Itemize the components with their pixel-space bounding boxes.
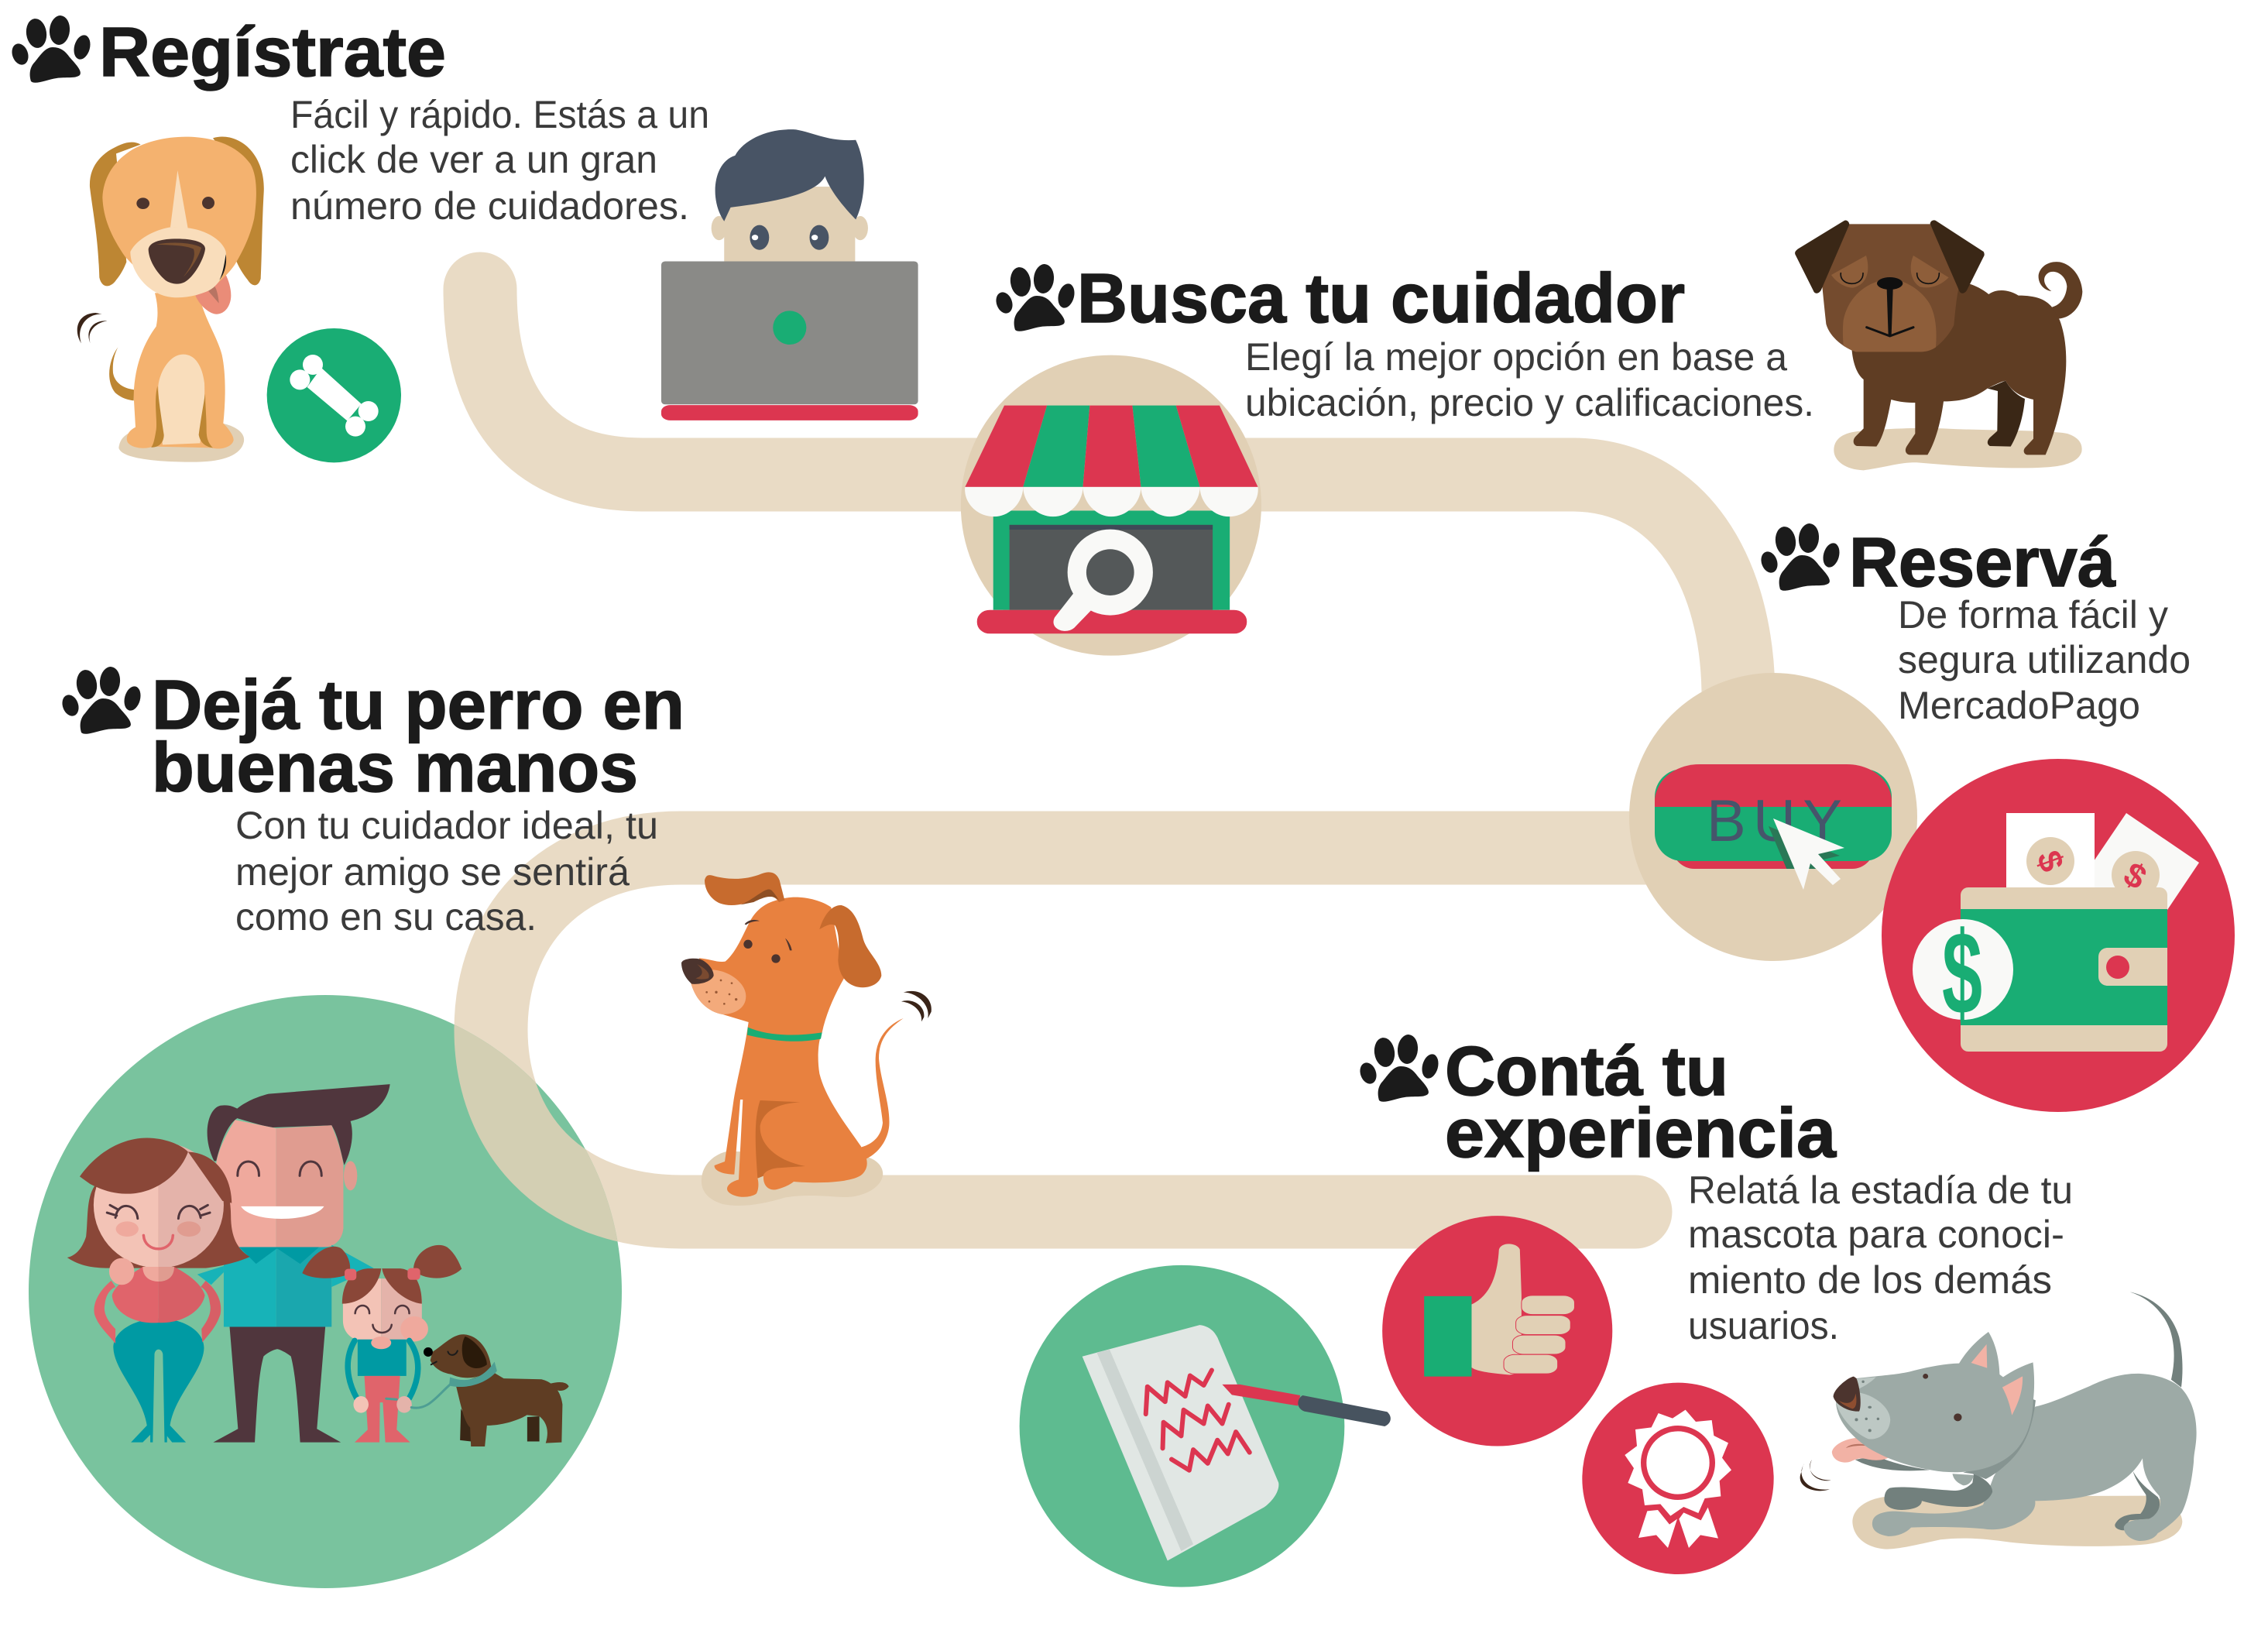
text: dejá description: como en su casa.: [235, 895, 537, 939]
icon: notebook and pen badge: [1020, 1265, 1391, 1587]
text: busca description: [1245, 335, 1814, 424]
text: contá description: [1688, 1168, 2073, 1347]
illustration: wallet badge: [1882, 759, 2235, 1112]
text: contá description: usuarios.: [1688, 1304, 1839, 1347]
heading: Contá tu experiencia: Contá tu: [1445, 1033, 1728, 1110]
illustration: family with dog: [67, 1084, 569, 1446]
heading: Regístrate: Regístrate: [99, 14, 446, 91]
icon: bone badge: [267, 328, 401, 462]
text: reservá description: MercadoPago: [1898, 684, 2140, 727]
road: lower winding path: [491, 848, 1781, 1212]
heading: Dejá tu perro en buenas manos: [60, 666, 685, 807]
text: registrate description: click de ver a un gran: [290, 138, 657, 181]
text: dejá description: Con tu cuidador ideal, tu: [235, 804, 658, 847]
text: reservá description: [1898, 593, 2191, 727]
heading: Busca tu cuidador: Busca tu cuidador: [1077, 260, 1685, 338]
heading: Dejá tu perro en buenas manos: Dejá tu perro en: [152, 667, 685, 744]
road overlap on family circle: [454, 1024, 618, 1242]
illustration: yellow dog: [77, 136, 264, 462]
heading: Dejá tu perro en buenas manos: buenas manos: [152, 729, 638, 807]
illustration: wallet badge: $: [2117, 855, 2153, 897]
illustration: orange dog: [681, 872, 932, 1206]
heading: Contá tu experiencia: experiencia: [1445, 1095, 1837, 1172]
illustration: man at laptop: [661, 129, 918, 420]
girl: [302, 1245, 461, 1443]
text: busca description: ubicación, precio y calificaciones.: [1245, 381, 1814, 424]
text: contá description: Relatá la estadía de tu: [1688, 1168, 2073, 1212]
text: dejá description: [235, 804, 658, 939]
text: dejá description: mejor amigo se sentirá: [235, 850, 630, 894]
illustration: wallet badge: $: [2029, 846, 2071, 877]
text: reservá description: De forma fácil y: [1898, 593, 2168, 637]
text: registrate description: Fácil y rápido. Estás a un: [290, 93, 709, 136]
text: busca description: Elegí la mejor opción en base a: [1245, 335, 1787, 379]
man: [197, 1084, 390, 1443]
illustration: wallet badge: $: [1942, 908, 1982, 1039]
woman: [67, 1138, 250, 1443]
text: contá description: mascota para conoci-: [1688, 1213, 2064, 1256]
heading: Reservá: Reservá: [1849, 524, 2116, 602]
illustration: buy button with cursor: BUY: [1707, 788, 1842, 854]
road: top winding path: [480, 289, 1738, 697]
illustration: grey dog: [1800, 1292, 2197, 1549]
illustration: brown pug: [1795, 220, 2082, 470]
text: registrate description: número de cuidadores.: [290, 184, 689, 228]
heading: Contá tu experiencia: [1357, 1033, 1837, 1172]
small dog on leash: [386, 1334, 569, 1446]
icon: award rosette badge: [1582, 1383, 1774, 1574]
text: registrate description: [290, 93, 709, 228]
text: contá description: miento de los demás: [1688, 1258, 2052, 1302]
text: reservá description: segura utilizando: [1898, 638, 2191, 681]
icon: family circle background: [29, 995, 622, 1588]
illustration: buy button with cursor: [1629, 673, 1917, 961]
icon: thumbs up badge: [1382, 1216, 1612, 1446]
illustration: storefront with magnifier: [961, 355, 1261, 656]
